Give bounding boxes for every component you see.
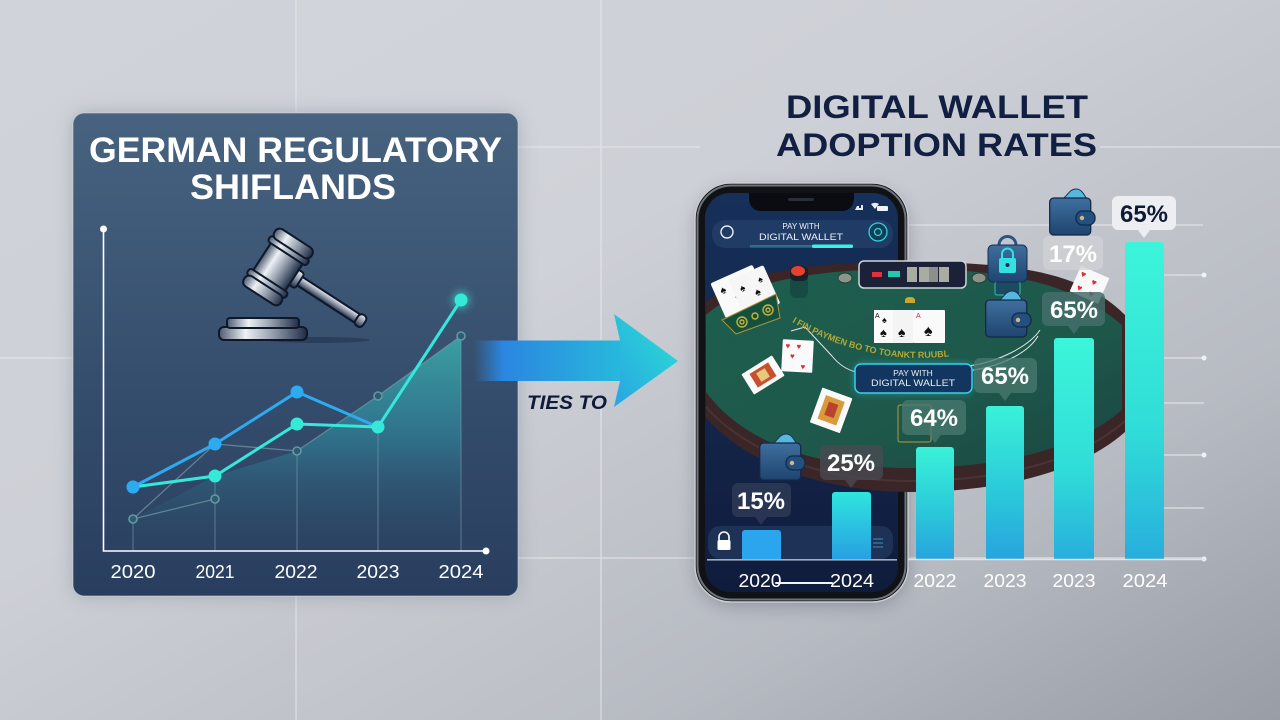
x axis years: 2020 (110, 562, 156, 582)
wallet pay bar (712, 220, 893, 248)
playing cards: center spades: ♠ (898, 324, 906, 340)
x axis years: 2021 (196, 562, 234, 582)
gold felt lettering: I FIN PAYMEN BO TO TOANKT RUUBL (792, 317, 950, 358)
panel: German regulatory line chart (73, 113, 518, 596)
table chip panel (859, 261, 966, 288)
playing cards: center spades: A (916, 313, 921, 320)
playing cards: hearts and kings: ♥ (800, 362, 806, 371)
label: 65% top: 65% (1120, 201, 1168, 228)
playing card: hearts corner (1070, 266, 1109, 304)
series: blue line (126, 386, 378, 494)
heading: Digital Wallet Adoption Rates (776, 89, 1097, 163)
phone (695, 183, 908, 606)
gold felt lettering (790, 297, 1040, 372)
series: teal line (126, 291, 470, 494)
playing cards: hearts and kings: ♥ (785, 341, 791, 351)
label: 65% (974, 358, 1037, 401)
label: 64%: 64% (910, 405, 958, 432)
red button (790, 266, 808, 298)
arrow: ties to (474, 314, 678, 414)
chart axes (100, 226, 490, 554)
icon: gavel (219, 226, 383, 352)
icon: wallet top (1050, 189, 1095, 235)
heading: Digital Wallet Adoption Rates: ADOPTION RATES (776, 127, 1097, 163)
blackjack table (706, 260, 1125, 492)
line chart (100, 226, 490, 582)
x axis years: 2023 (356, 562, 400, 582)
pay with digital wallet button: PAY WITH (893, 368, 933, 378)
playing card: hearts corner: ♥ (1075, 282, 1084, 294)
bar year labels: 2024 (1122, 571, 1168, 591)
bar year labels: 2023 (984, 571, 1026, 591)
x axis years: 2024 (438, 562, 484, 582)
playing card: hearts corner: ♥ (1087, 289, 1095, 300)
wallet pay bar: DIGITAL WALLET (759, 232, 844, 242)
label: 25%: 25% (827, 450, 875, 477)
wallet pay bar: PAY WITH (782, 222, 820, 231)
bar year labels: 2022 (914, 571, 956, 591)
pay with digital wallet button: DIGITAL WALLET (871, 378, 956, 388)
playing cards: left fan: ♠ (738, 282, 748, 295)
icon: lock tower (988, 236, 1027, 295)
arrow: ties to: TIES TO (527, 392, 607, 414)
heading: German Regulatory Shiflands: SHIFLANDS (190, 168, 396, 207)
playing cards: left fan: ♠ (739, 275, 750, 288)
x axis years: 2022 (274, 562, 318, 582)
playing cards: left fan: ♠ (732, 287, 744, 303)
playing cards: center spades (874, 310, 945, 343)
bars (742, 242, 1164, 559)
label: 15% (732, 483, 791, 525)
heading: German Regulatory Shiflands: GERMAN REGULATORY (89, 131, 502, 170)
label: 17%: 17% (1049, 241, 1097, 268)
table chips (838, 273, 986, 283)
heading: Digital Wallet Adoption Rates: DIGITAL WALLET (786, 89, 1088, 125)
bar year labels: 2023 (1052, 571, 1096, 591)
phone notch and status bar (749, 193, 888, 211)
playing cards: center spades: ♠ (880, 325, 887, 340)
label: 64% (898, 400, 966, 443)
label: 25% (820, 445, 883, 488)
bar year labels: 2020 (738, 571, 782, 591)
bar year labels (738, 571, 1168, 591)
icon: wallet on table (986, 291, 1031, 337)
label: 65% second: 65% (1050, 297, 1098, 324)
bar chart: digital wallet adoption (732, 189, 1205, 591)
x axis years (110, 562, 484, 582)
playing cards: center spades: A (875, 313, 880, 320)
playing cards: left fan: ♠ (718, 284, 729, 297)
playing cards: hearts and kings: ♥ (796, 342, 802, 351)
icon: wallet in phone (760, 434, 805, 480)
playing cards: hearts and kings (741, 339, 853, 433)
playing cards: left fan: ♠ (753, 286, 763, 299)
value labels (732, 358, 1037, 525)
playing cards: left fan (710, 265, 780, 334)
phone bottom bar (707, 526, 897, 584)
playing cards: hearts and kings: ♥ (790, 352, 795, 361)
heading: German Regulatory Shiflands (89, 131, 502, 207)
playing card: hearts corner: ♥ (1090, 277, 1099, 288)
playing card: hearts corner: ♥ (1079, 269, 1088, 280)
playing cards: left fan: ♠ (756, 274, 765, 285)
playing cards: center spades: ♠ (924, 323, 933, 340)
playing cards: center spades: ♠ (882, 315, 887, 325)
bar year labels: 2024 (830, 571, 874, 591)
label: 15%: 15% (737, 488, 785, 515)
label: 65%: 65% (981, 363, 1029, 390)
pay with digital wallet button (855, 364, 972, 393)
